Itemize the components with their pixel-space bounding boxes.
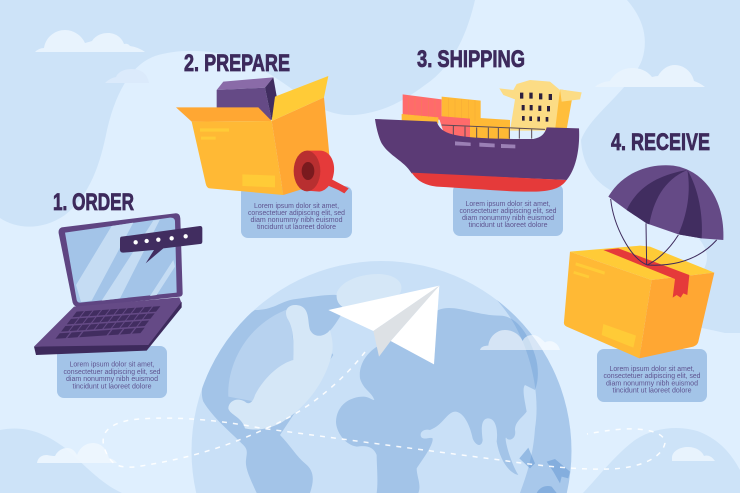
paper plane [328,286,439,364]
text box: prepare: consectetuer adipiscing elit, sed [248,210,345,217]
parachute canopy [608,165,723,240]
text box: receive: consectetuer adipiscing elit, sed [604,373,701,380]
land: islands [519,448,570,493]
text box: order: diam nonummy nibh euismod [66,376,158,383]
icon: parcel with parachute [564,165,723,358]
icon: password speech bubble [120,226,202,263]
step 4: receive [564,129,723,402]
text box: shipping: Lorem ipsum dolor sit amet, [466,201,551,208]
land: eurasia and africa [336,308,538,493]
hull [375,119,579,180]
land: pale atlantic highlight [228,305,333,429]
icon: tape roll [294,151,349,193]
land: north and central america [202,295,346,493]
text box: shipping: tincidunt ut laoreet dolore [468,222,548,229]
heading: 3. shipping: 3. SHIPPING [417,46,525,73]
dashed flight path [103,352,665,469]
text box: order: Lorem ipsum dolor sit amet, [70,362,155,368]
globe shadow crescent [497,300,572,493]
land: lighter inner band [228,308,295,402]
text box: receive: Lorem ipsum dolor sit amet, [610,366,695,373]
ship bridge [499,80,582,131]
cloud: bottom right [672,447,715,461]
heading: 4. receive: 4. RECEIVE [611,129,710,156]
cloud: top right [595,65,705,87]
cloud: small left [105,69,149,83]
text box: order [57,346,167,398]
text box: shipping: consectetuer adipiscing elit, sed [460,208,557,215]
text box: shipping [453,184,563,236]
heading: 2. prepare: 2. PREPARE [184,50,290,77]
text box: receive: diam nonummy nibh euismod [606,380,698,388]
text box: receive [597,349,707,402]
text box: receive: tincidunt ut laoreet dolore [612,388,692,394]
cloud: bottom left [37,443,117,463]
text box: prepare: tincidunt ut laoreet dolore [257,224,336,231]
step 3: shipping [375,46,582,236]
text box: order: tincidunt ut laoreet dolore [72,384,152,390]
cloud: top left [35,30,145,52]
text box: order: consectetuer adipiscing elit, sed [64,369,161,376]
globe [191,261,580,493]
cloud over globe [480,330,560,350]
land: faint cloud patch [337,274,401,309]
text box: prepare [241,186,352,238]
step 2: prepare [176,50,352,238]
icon: laptop [34,213,202,355]
text box: prepare: diam nonummy nibh euismod [250,217,343,224]
text box: prepare: Lorem ipsum dolor sit amet, [254,203,339,210]
heading: 1. order: 1. ORDER [53,189,134,216]
icon: open box [176,76,349,195]
containers [402,94,510,139]
step 1: order [34,189,202,398]
closed box [564,246,714,358]
icon: cargo ship [375,80,582,192]
parachute strings [611,199,717,265]
text box: shipping: diam nonummy nibh euismod [462,215,554,222]
